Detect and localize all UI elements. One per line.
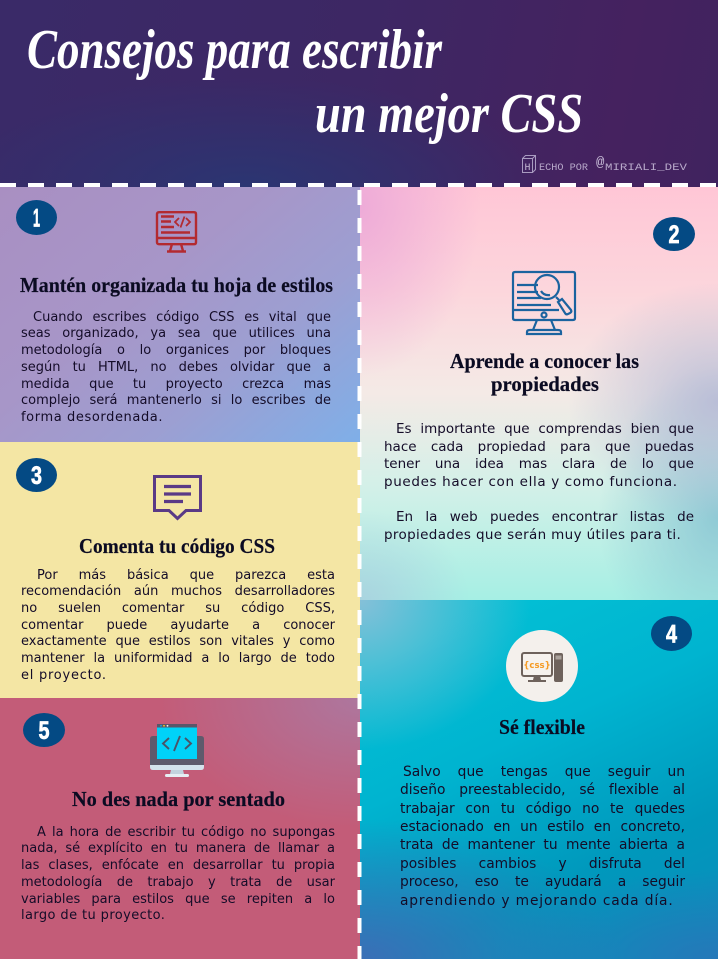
text block 1: forma desordenada. (21, 410, 163, 425)
text block 3: Por más básica que parezca esta (37, 568, 335, 583)
text block 1: Cuando escribes código CSS es vital que (33, 310, 331, 325)
text block 4: posibles cambios y disfruta del (400, 856, 685, 872)
icon: monitor with magnifier (512, 270, 576, 336)
text block 5: largo de tu proyecto. (21, 908, 165, 923)
text block 4: proceso, eso te ayudará a seguir (400, 874, 685, 890)
text block 3: el proyecto. (21, 668, 107, 683)
panel: header banner (0, 0, 718, 187)
heading 2: Aprende a conocer las (450, 349, 639, 373)
badge 2: 2 (668, 221, 680, 249)
text block 3: mantener la uniformidad a lo largo de todo (21, 651, 335, 666)
icon: desktop with code window (150, 724, 204, 777)
text block 2a: Es importante que comprendas bien que (396, 421, 694, 437)
text block 4: diseño preestablecido, sé flexible al (400, 782, 685, 798)
text block 1 (21, 310, 331, 425)
text block 1: complejo será mantenerlo si lo escribes de (21, 393, 331, 408)
panel: 3 comment code (0, 442, 360, 698)
icon: comment bubble (153, 475, 202, 520)
badge 5 (23, 713, 65, 747)
panel: 5 take nothing for granted (0, 698, 360, 959)
text block 2b: En la web puedes encontrar listas de (396, 509, 694, 525)
heading 2 (450, 349, 639, 396)
badge 5: 5 (38, 717, 50, 745)
text block 5: A la hora de escribir tu código no supongas (37, 825, 335, 840)
badge 4 (651, 616, 692, 651)
title (27, 19, 583, 145)
text block 4: Salvo que tengas que seguir un (403, 764, 685, 780)
icon: css computer in circle: {css} (523, 661, 551, 671)
panel: 4 be flexible (360, 600, 718, 959)
heading 3: Comenta tu código CSS (79, 534, 275, 558)
text block 1: según tu HTML, no debes olvidar que a (21, 360, 331, 375)
text block 3: no suelen comentar su código CSS, (21, 601, 335, 616)
text block 2b: propiedades que serán muy útiles para ti. (384, 527, 681, 543)
credit line: @ (596, 155, 605, 171)
text block 3: comentar puede ayudarte a conocer (21, 618, 335, 633)
text block 2b (384, 509, 694, 543)
text block 4: estacionado en un estilo en concreto, (400, 819, 685, 835)
text block 5: variables para estilos que se repiten a lo (21, 892, 335, 907)
text block 4: trabajar con tu código no te quedes (400, 801, 685, 817)
text block 5: metodología de trabajo y trata de usar (21, 875, 335, 890)
text block 2a: tener una idea mas clara de lo que (384, 456, 694, 472)
text block 1: metodología o lo organices por bloques (21, 343, 331, 358)
heading 2: propiedades (491, 372, 599, 396)
text block 1: medida que tu proyecto crezca mas (21, 377, 331, 392)
credit line (522, 155, 688, 174)
text block 4 (400, 764, 686, 909)
title: Consejos para escribir (27, 19, 443, 81)
badge 3: 3 (31, 462, 42, 490)
text block 2a: hace cada propiedad para que puedas (384, 439, 694, 455)
heading 5: No des nada por sentado (72, 787, 285, 811)
title: un mejor CSS (315, 83, 583, 145)
heading 1: Mantén organizada tu hoja de estilos (20, 273, 333, 297)
heading 4: Sé flexible (499, 715, 585, 739)
badge 4: 4 (666, 620, 677, 648)
credit line: MIRIALI_DEV (605, 162, 688, 174)
credit line: H (524, 163, 531, 174)
text block 1: seas organizado, ya sea que utilices una (21, 326, 331, 341)
badge 1 (16, 200, 57, 235)
text block 5: nada, sé explícito en tu manera de llamar a (21, 841, 335, 856)
text block 2a (384, 421, 694, 490)
text block 5 (21, 825, 335, 923)
panel: 2 learn properties (360, 187, 718, 600)
badge 1: 1 (33, 204, 40, 232)
text block 4: aprendiendo y mejorando cada día. (400, 893, 674, 909)
text block 3 (21, 568, 335, 683)
text block 5: las clases, enfócate en desarrollar tu propia (21, 858, 335, 873)
text block 3: exactamente que estilos son vitales y como (21, 634, 335, 649)
text block 2a: puedes hacer con ella y como funciona. (384, 474, 678, 490)
credit line: ECHO POR (539, 162, 589, 174)
text block 4: trata de mantener tu mente abierta a (400, 837, 685, 853)
text block 3: recomendación aún muchos desarrolladores (21, 584, 335, 599)
icon: css computer in circle (506, 630, 578, 702)
panel: 1 organise stylesheet (0, 187, 360, 442)
badge 2 (653, 217, 695, 251)
badge 3 (16, 458, 57, 492)
icon: monitor with code (156, 211, 198, 253)
